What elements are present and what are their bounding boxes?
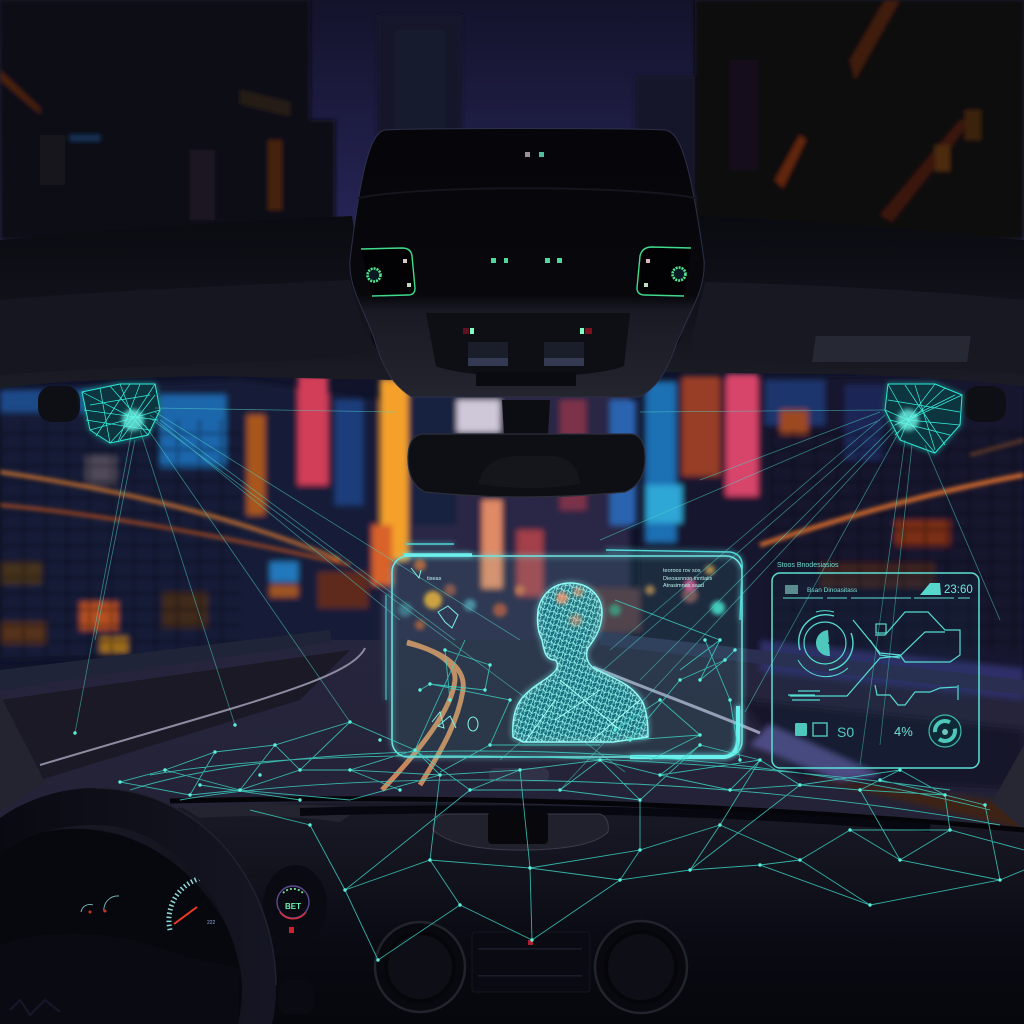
bokeh street lights [398,559,725,630]
status icons and readouts: 4% [894,724,913,739]
roof headliner with sun visors [0,216,1024,388]
right console camera module [637,247,691,296]
panel small data glyphs [411,568,478,731]
indicator lights [463,152,592,334]
small gauges [81,896,119,914]
rear-view mirror [408,400,645,497]
panel header [783,583,973,598]
data network mesh lines [120,600,1024,960]
status icons and readouts: S0 [837,724,854,740]
speedometer: 222 [207,920,216,926]
building window grids [0,420,240,660]
label plate on the visor [812,336,971,362]
air vent right [595,921,687,1013]
instrument cluster [0,829,327,1024]
radial gauge [798,611,853,677]
secondary gauge with readout [277,886,309,933]
holographic driver panel [386,544,742,757]
panel status text: teoroos rov sos [663,568,701,574]
background: night sky [0,0,1024,240]
camera sensing beams [75,408,1000,790]
panel caption: Stoos Bnodesiasios [777,562,839,569]
A-pillars [0,695,1024,830]
air vent left [375,922,465,1012]
road with lane markings [0,630,1024,830]
speedometer [169,877,216,930]
status icons and readouts [795,715,961,747]
sensor dashboard panel [772,562,979,768]
panel status text [427,568,712,589]
data network nodes [75,640,1000,960]
centre stack [472,932,590,992]
right camera with face-scan mesh [885,384,1006,453]
panel header: Bsan Dinoasitass [807,587,858,594]
panel status text: Atrasimnas saad [663,583,704,589]
overhead sensor console [350,128,704,397]
central tray and sensor [433,768,608,850]
panel status text: Dieoasnnon inntiaiis [663,576,712,582]
circuit diagram [788,612,960,705]
city street scene through the windshield [0,370,1024,690]
panel status text: tiseas [427,576,442,582]
wireframe driver bust [505,575,655,750]
panel header: 23:60 [944,584,973,596]
left console camera module [361,248,415,296]
left camera with face-scan mesh [38,384,160,443]
dashboard [0,768,1024,1024]
city towers above the windshield [0,0,1024,240]
steering wheel [0,788,314,1024]
secondary gauge with readout: BET [285,902,301,911]
